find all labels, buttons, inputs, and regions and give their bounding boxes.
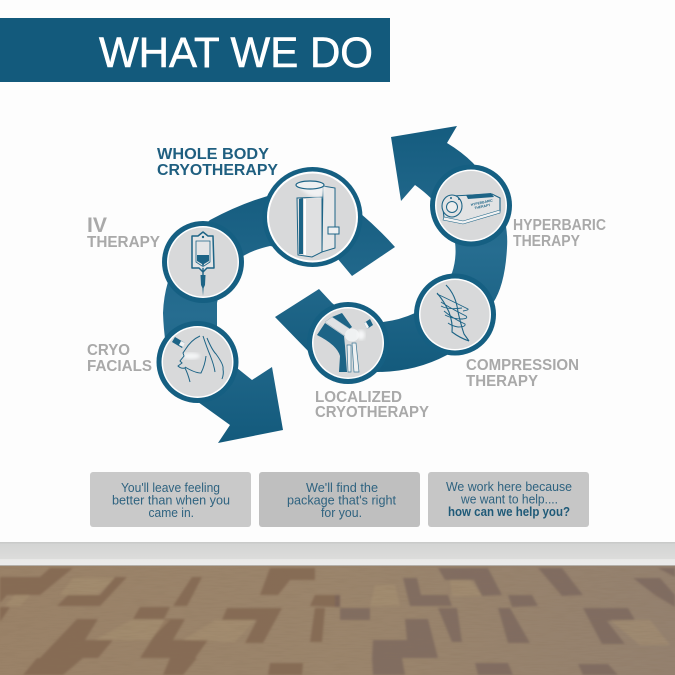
callout: how can we help: We work here because — [446, 479, 572, 494]
chamber label: THERAPY — [474, 203, 492, 210]
icon: IV bag — [162, 221, 244, 303]
callout: how can we help: we want to help.... — [460, 492, 558, 506]
icon: compression leg — [414, 274, 496, 356]
heading: hyperbaric therapy: THERAPY — [513, 233, 581, 250]
heading: hyperbaric therapy: HYPERBARIC — [513, 217, 606, 234]
callout: how can we help — [428, 472, 589, 527]
callout: right package: package that's right — [287, 492, 396, 508]
icon: knee — [307, 302, 389, 384]
callout: right package — [259, 472, 420, 527]
callout: feeling better: came in. — [148, 505, 194, 520]
heading: cryo facials: FACIALS — [87, 358, 152, 375]
arrow: right cycle arrow — [275, 126, 507, 375]
heading: compression therapy: THERAPY — [466, 373, 539, 390]
wood floor — [0, 566, 675, 675]
heading: localized cryotherapy: LOCALIZED — [315, 389, 402, 406]
callout: feeling better: better than when you — [112, 492, 230, 508]
icon: cryo facial — [156, 321, 238, 403]
arrow: left cycle arrow — [163, 187, 395, 443]
heading: whole body cryotherapy: CRYOTHERAPY — [157, 162, 278, 179]
icon: whole body cryotherapy chamber — [262, 167, 362, 267]
title: WHAT WE DO — [99, 29, 373, 77]
callout: feeling better — [90, 472, 251, 527]
icon: hyperbaric chamber — [430, 164, 512, 246]
heading: IV therapy: IV — [87, 214, 107, 237]
callout: right package: We'll find the — [306, 480, 378, 495]
heading: compression therapy — [466, 357, 579, 390]
callout: right package: for you. — [321, 505, 362, 520]
heading: hyperbaric therapy — [513, 217, 606, 250]
heading: whole body cryotherapy: WHOLE BODY — [157, 146, 269, 163]
skirting board — [0, 542, 675, 566]
callout: feeling better: You'll leave feeling — [121, 480, 220, 495]
heading: IV therapy: THERAPY — [87, 234, 161, 251]
heading: IV therapy — [87, 214, 161, 251]
title banner — [0, 18, 390, 82]
heading: cryo facials: CRYO — [87, 342, 130, 359]
heading: cryo facials — [87, 342, 152, 375]
heading: localized cryotherapy — [315, 389, 430, 421]
heading: compression therapy: COMPRESSION — [466, 357, 579, 374]
heading: localized cryotherapy: CRYOTHERAPY — [315, 404, 430, 421]
callout: how can we help: how can we help you? — [448, 504, 570, 519]
heading: whole body cryotherapy — [157, 146, 278, 179]
chamber label: HYPERBARIC — [470, 198, 493, 207]
